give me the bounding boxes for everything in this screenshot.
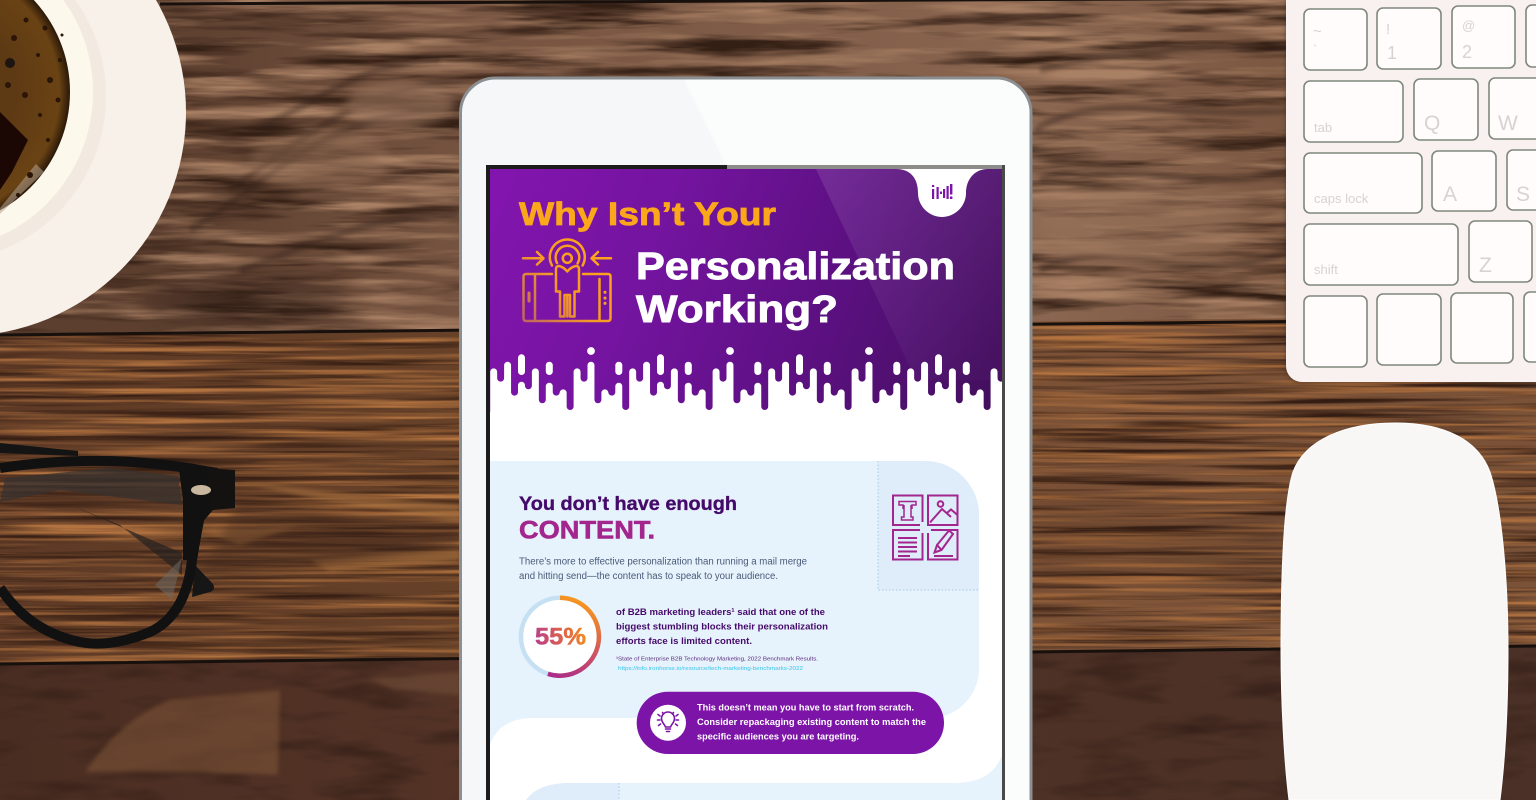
- callout text: specific audiences you are targeting.: [697, 732, 859, 742]
- body paragraph: There’s more to effective personalization than running a mail merge: [519, 556, 807, 568]
- keyboard: tab: [1314, 120, 1332, 135]
- panel corner block: [878, 461, 979, 590]
- keyboard: shift: [1314, 262, 1338, 277]
- keyboard: ~: [1313, 23, 1322, 40]
- logo tab: [896, 169, 988, 217]
- keyboard: A: [1443, 183, 1457, 206]
- keyboard: caps lock: [1314, 191, 1369, 206]
- heading: you don't have enough: You don’t have enough: [519, 493, 737, 515]
- panel: next section background: [520, 755, 1002, 800]
- stat description: of B2B marketing leaders¹ said that one of the: [616, 607, 825, 618]
- tablet: [460, 78, 1060, 800]
- icon: light bulb: [650, 705, 686, 741]
- keyboard: 1: [1387, 43, 1397, 63]
- icon: content types grid: [893, 496, 958, 560]
- keyboard: Q: [1424, 112, 1440, 135]
- title line 2: Personalization: [636, 246, 955, 288]
- eyeglasses: [0, 443, 235, 644]
- tablet screen frame: [486, 165, 1005, 800]
- title line 3: Working?: [636, 289, 838, 331]
- icon: person in mobile screen: [523, 240, 611, 321]
- stat description: efforts face is limited content.: [616, 636, 752, 647]
- body paragraph: and hitting send—the content has to speak to your audience.: [519, 571, 778, 582]
- callout text: Consider repackaging existing content to match the: [697, 717, 926, 728]
- callout text: [697, 703, 926, 742]
- chart: 55% donut: [519, 596, 601, 678]
- heading: content: CONTENT.: [519, 517, 655, 545]
- keyboard: `: [1313, 42, 1317, 57]
- body paragraph: [519, 556, 807, 582]
- keyboard: [1286, 0, 1536, 384]
- footnote source: ¹State of Enterprise B2B Technology Marketing, 2022 Benchmark Results.: [616, 656, 818, 662]
- infographic screen content: [490, 169, 1002, 800]
- keyboard: 2: [1462, 42, 1472, 62]
- keyboard: !: [1386, 21, 1390, 38]
- header banner: [490, 169, 1002, 412]
- stat description: biggest stumbling blocks their personalization: [616, 622, 828, 632]
- title line 1: Why Isn’t Your: [519, 196, 776, 232]
- callout text: This doesn’t mean you have to start from scratch.: [697, 703, 914, 714]
- keyboard: W: [1498, 112, 1518, 135]
- keyboard: S: [1516, 183, 1530, 206]
- callout pill: [637, 692, 944, 754]
- dripping white edge: [490, 347, 1002, 412]
- footnote link: https://info.ironhorse.io/resource/tech-marketing-benchmarks-2022: [618, 666, 803, 672]
- keyboard: Z: [1479, 254, 1492, 277]
- stat value: 55%: [535, 624, 586, 651]
- mouse: [1281, 423, 1508, 800]
- glare on header: [816, 169, 1002, 380]
- panel: content section background: [490, 461, 979, 745]
- stat description: [616, 608, 828, 644]
- coffee cup on saucer: [0, 0, 186, 336]
- keyboard: @: [1462, 18, 1475, 33]
